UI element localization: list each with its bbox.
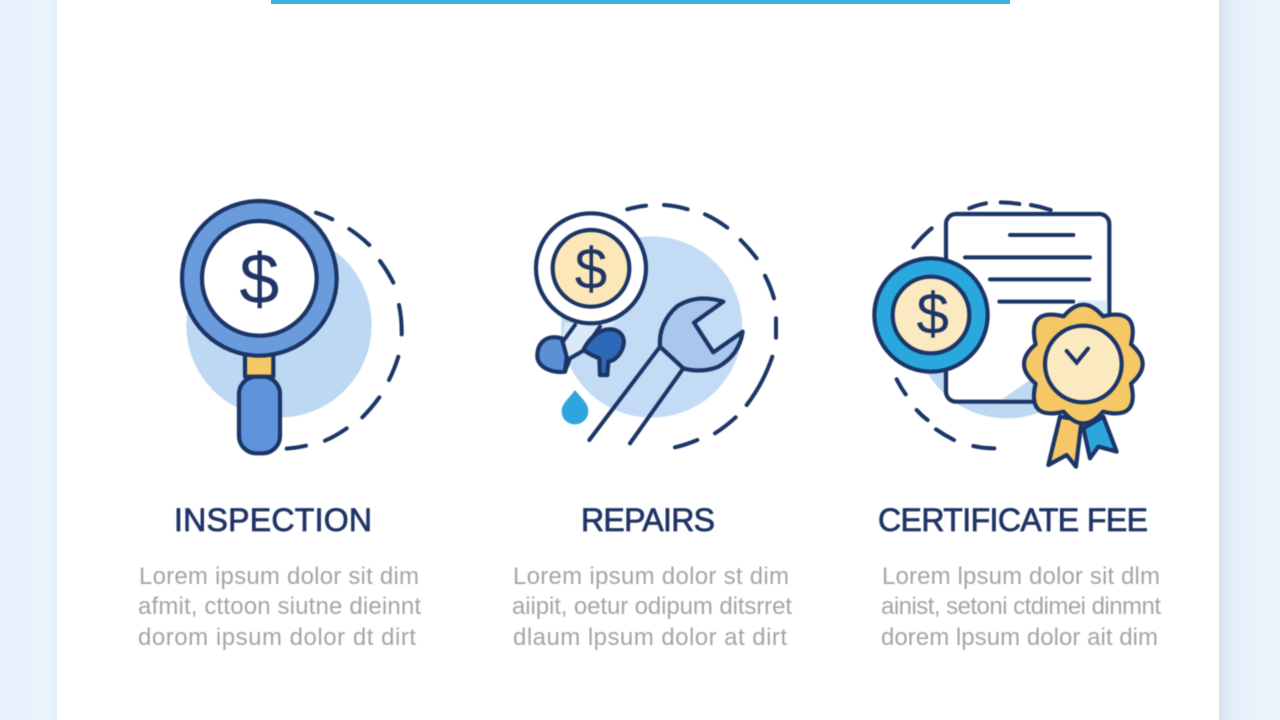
- body text: repairs: Lorem ipsum dolor st dim: [513, 563, 789, 590]
- heading: repairs: REPAIRS: [581, 502, 715, 538]
- heading: inspection: INSPECTION: [174, 502, 372, 538]
- icon: faucet, coin and wrench: [536, 205, 776, 447]
- body text: inspection: Lorem ipsum dolor sit dim: [139, 563, 419, 590]
- icon: water drop: [562, 390, 588, 424]
- icon: certificate with coin and badge: $: [916, 281, 949, 346]
- body text: inspection: afmit, cttoon siutne dieinnt: [138, 593, 421, 620]
- column: inspection: [138, 201, 421, 651]
- body text: certificate fee: [881, 563, 1161, 651]
- icon: faucet, coin and wrench: $: [575, 236, 607, 301]
- body text: certificate fee: Lorem lpsum dolor sit dlm: [882, 563, 1160, 590]
- icon: magnifying glass with dollar: $: [239, 239, 279, 319]
- body text: inspection: dorom ipsum dolor dt dirt: [138, 624, 416, 651]
- body text: certificate fee: dorem lpsum dolor ait dim: [881, 624, 1158, 651]
- icon: magnifying glass with dollar: [182, 201, 402, 453]
- top accent bar: [271, 0, 1010, 4]
- icon: certificate with coin and badge: [874, 202, 1143, 467]
- column: certificate fee: [874, 202, 1161, 651]
- body text: repairs: dlaum lpsum dolor at dirt: [513, 624, 787, 651]
- body text: repairs: aiipit, oetur odipum ditsrret: [512, 593, 792, 620]
- heading: certificate fee: CERTIFICATE FEE: [878, 502, 1148, 538]
- column: repairs: [512, 205, 792, 651]
- body text: repairs: [512, 563, 792, 651]
- body text: inspection: [138, 563, 421, 651]
- body text: certificate fee: ainist, setoni ctdimei dinmnt: [881, 593, 1161, 620]
